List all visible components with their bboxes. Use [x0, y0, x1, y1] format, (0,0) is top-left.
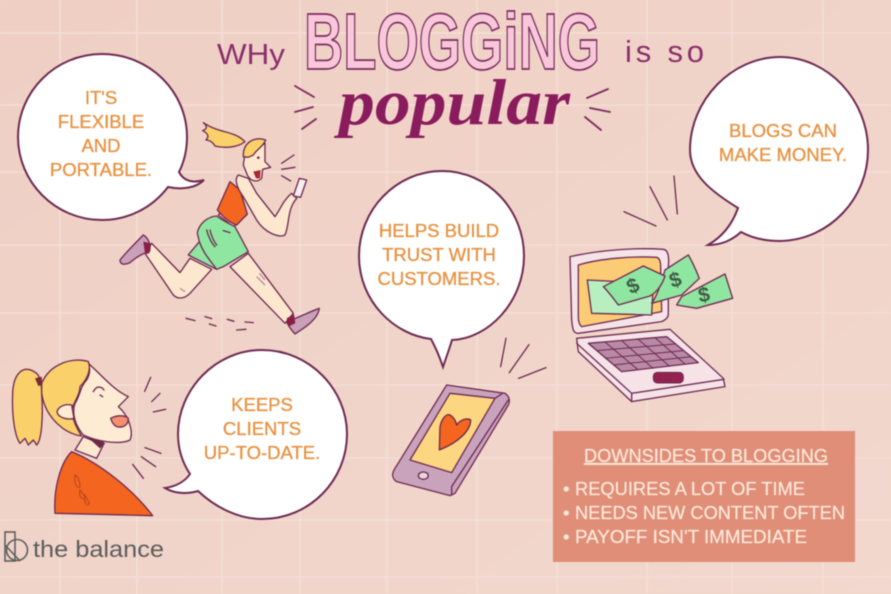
illustration: laptop with money — [570, 176, 733, 402]
panel heading: DOWNSIDES TO BLOGGING — [584, 445, 828, 466]
title — [217, 0, 704, 139]
title rays left — [295, 86, 316, 129]
bubble: build trust: TRUST WITH — [382, 244, 496, 265]
title: popular: popular — [333, 67, 571, 139]
bullet list: • — [563, 478, 569, 499]
illustration: runner with phone — [120, 123, 319, 334]
bubble: keeps clients: UP-TO-DATE. — [204, 442, 320, 463]
bubble: make money: MAKE MONEY. — [719, 144, 847, 165]
bubble: flexible and portable: AND — [81, 135, 121, 156]
illustration: phone with heart — [393, 338, 546, 496]
bubble: keeps clients: CLIENTS — [223, 418, 301, 439]
bubble: build trust: HELPS BUILD — [379, 220, 499, 241]
logo: the balance — [5, 532, 164, 562]
bubble: make money: BLOGS CAN — [729, 120, 837, 141]
title: is so: is so — [625, 34, 704, 69]
bubble: build trust — [359, 171, 524, 367]
bullet list: • — [563, 502, 569, 523]
bubble: flexible and portable: FLEXIBLE — [58, 111, 144, 132]
bubble: make money — [690, 57, 868, 245]
panel: downsides to blogging — [553, 431, 855, 562]
bubble: keeps clients — [165, 350, 347, 519]
bubble: flexible and portable: PORTABLE. — [50, 159, 152, 180]
illustration: laptop with money: $ — [667, 267, 685, 293]
title: why: WHy — [217, 39, 286, 71]
bullet list: NEEDS NEW CONTENT OFTEN — [575, 502, 845, 523]
illustration: laptop with money: $ — [696, 283, 712, 307]
logo: the balance: the balance — [33, 536, 164, 562]
bullet list: PAYOFF ISN'T IMMEDIATE — [575, 526, 807, 547]
bubble: flexible and portable — [18, 54, 204, 220]
illustration: laptop with money: $ — [623, 273, 644, 299]
illustration: woman speaking — [12, 360, 166, 516]
bullet list: • — [563, 526, 569, 547]
bubble: build trust: CUSTOMERS. — [377, 268, 501, 289]
bullet list: REQUIRES A LOT OF TIME — [575, 478, 805, 499]
bubble: keeps clients: KEEPS — [231, 394, 293, 415]
bullet list — [563, 478, 845, 547]
title rays right — [585, 89, 610, 130]
bubble: flexible and portable: IT'S — [85, 87, 117, 108]
